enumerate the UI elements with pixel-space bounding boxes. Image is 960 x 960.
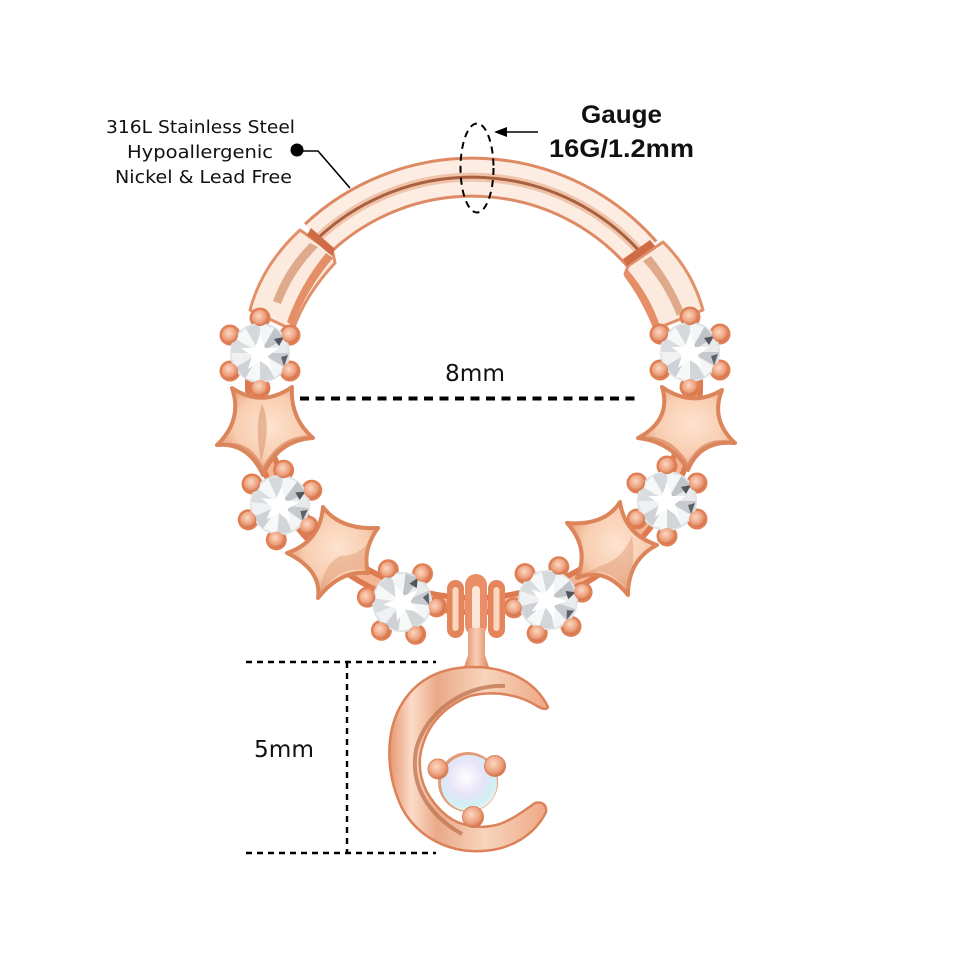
star: right upper	[638, 387, 735, 470]
gem: middle left	[235, 456, 325, 554]
gauge callout: Gauge	[581, 101, 662, 129]
gem: upper left	[220, 308, 300, 398]
bail rings	[447, 574, 505, 638]
star: left lower	[287, 507, 378, 598]
gem: lower right	[495, 544, 601, 656]
material callout	[106, 117, 350, 188]
gauge callout: 16G/1.2mm	[549, 135, 694, 163]
right band joint	[623, 240, 655, 266]
lower ring band	[255, 350, 693, 605]
material callout: Nickel & Lead Free	[115, 167, 292, 188]
5mm measurement	[246, 662, 436, 853]
gauge callout	[460, 101, 694, 212]
star: left upper	[217, 387, 313, 475]
8mm measurement: 8mm	[445, 361, 505, 387]
gem: upper right	[650, 306, 730, 398]
gem: lower left	[347, 544, 457, 660]
right hinge segment	[624, 242, 703, 328]
material callout: Hypoallergenic	[127, 142, 273, 163]
bail connector	[463, 628, 490, 670]
left band joint	[307, 228, 335, 256]
star: right lower	[567, 502, 657, 595]
moon inner crease	[415, 686, 505, 834]
upper ring band	[318, 177, 642, 254]
5mm measurement: 5mm	[254, 737, 314, 763]
left hinge segment	[250, 230, 335, 330]
opal stone	[428, 752, 506, 828]
gem: middle right	[626, 456, 708, 546]
material callout: 316L Stainless Steel	[106, 117, 295, 138]
moon charm	[389, 667, 548, 851]
